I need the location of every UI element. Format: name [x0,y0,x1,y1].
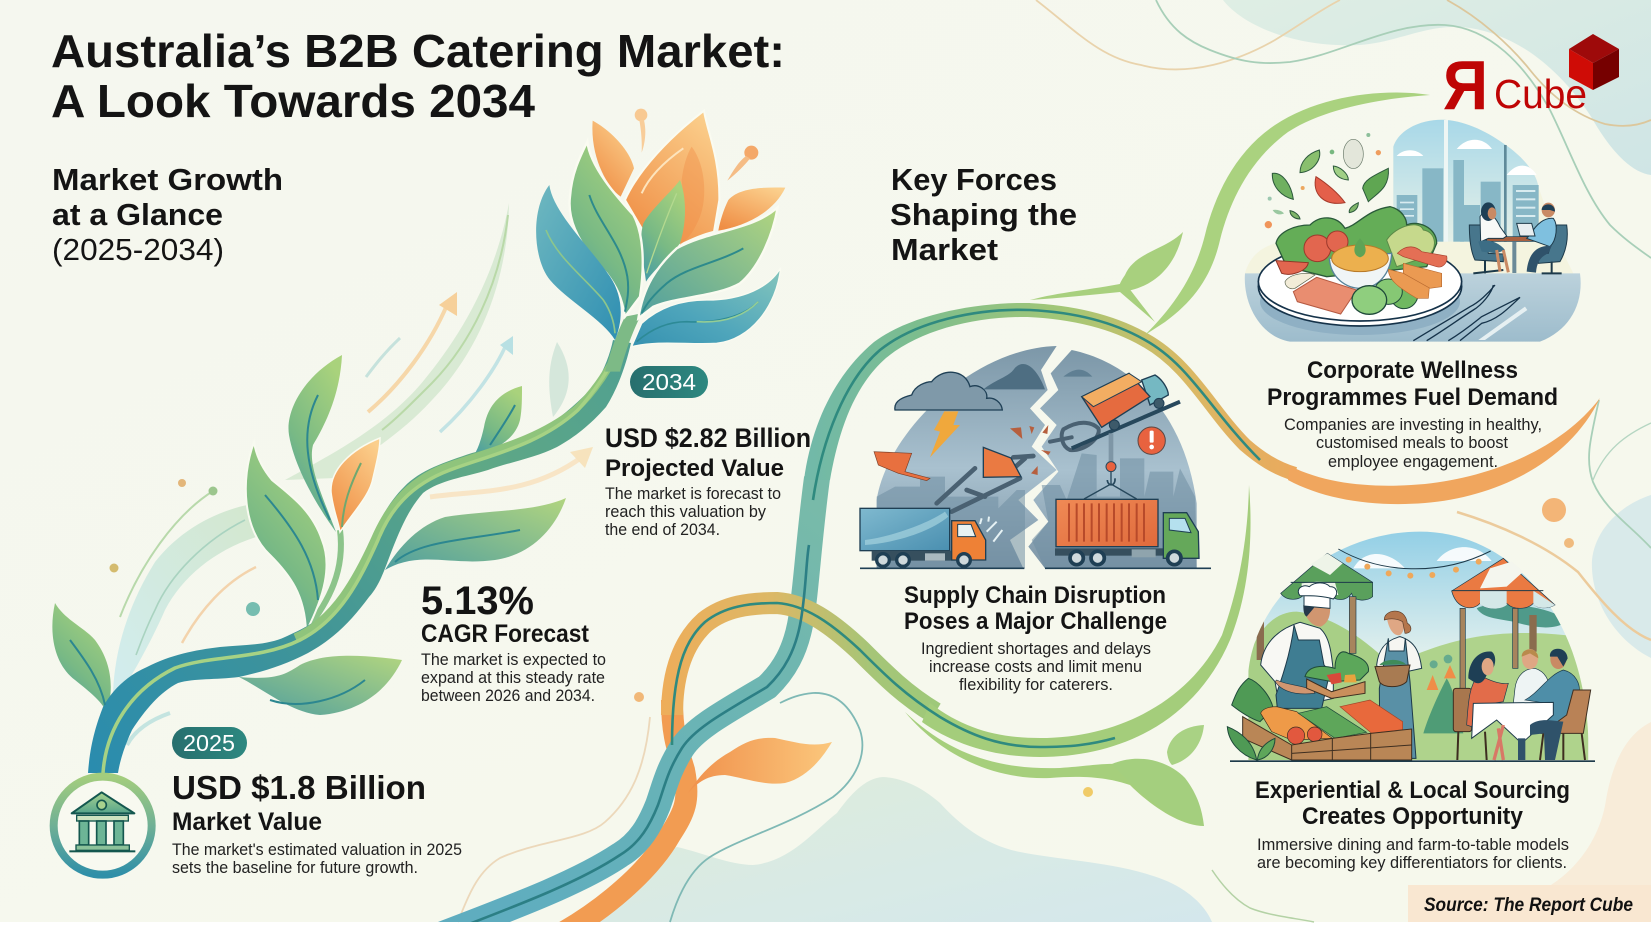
office people [1469,202,1567,273]
text: corporate wellness: customised meals to boost [1316,433,1508,452]
text: supply chain: increase costs and limit menu [929,657,1142,676]
text: corporate wellness [1267,357,1558,471]
stat: CAGR: expand at this steady rate [421,668,605,687]
logo: RCube: Cube [1494,71,1587,117]
pill: 2034 [630,366,708,398]
hills [1243,604,1590,760]
dome right [1028,350,1197,568]
padlock box [983,447,1021,477]
icon: bank [54,777,152,875]
illustration: local market dining [1227,532,1595,762]
heading: key forces: Market [891,232,998,267]
spark marks [980,517,1002,542]
salmon pieces [1388,269,1430,298]
ground line [1230,760,1595,762]
right awning [1452,558,1555,702]
source box: Source: The Report Cube [1424,895,1633,916]
logo: RCube [1443,34,1619,124]
tomatoes [1304,235,1331,262]
ribbon: green tail [922,485,1251,757]
string lights [1338,549,1491,579]
leaf: top left green [570,142,643,317]
text: corporate wellness: Corporate Wellness [1307,357,1518,384]
blue truck [860,508,986,566]
vine upper green band [295,345,620,637]
illustration: salad and office [1245,120,1581,342]
leaf: orange on plant [331,438,380,532]
petal: inner green [641,180,685,282]
lightning [930,411,960,457]
stamen [635,109,758,181]
clouds [1353,547,1492,568]
text: corporate wellness: Companies are investing in healthy, [1284,415,1542,434]
pill: 2025 [172,727,247,759]
title [51,25,785,127]
shards [1010,425,1051,475]
illustration: supply chain disruption [860,346,1211,568]
text: supply chain [904,582,1167,694]
arrow: peach horizontal [430,447,593,497]
ribbon: lower green branch [905,712,1204,826]
heading: market growth [52,162,283,267]
heading: key forces: Shaping the [890,197,1077,232]
stat: 2025 value [172,769,462,877]
flower stem [605,313,642,372]
ribbon: dark center lines [430,310,1260,930]
petal: left orange [592,121,634,197]
torn flag [874,452,930,481]
stat: CAGR [421,579,606,705]
heading: market growth: Market Growth [52,162,283,197]
petal: main orange [625,111,719,245]
bread slice [1285,273,1315,289]
heading: market growth: at a Glance [52,197,223,232]
chain right [1050,423,1099,450]
office window [1245,120,1573,273]
stat: 2034 value: The market is forecast to [605,484,781,503]
clouds [895,372,1002,410]
chain left [937,456,1033,512]
petal: right orange [718,188,785,231]
stat: 2034 value: Projected Value [605,455,784,482]
branch: top green sweep [1145,93,1430,335]
tilted truck [1082,373,1168,430]
leaf: bottom teal [632,268,781,347]
leaf: lower left [52,603,111,712]
text: experiential [1255,777,1570,872]
thin decorative curves [458,0,1651,922]
stat: 2034 value: USD $2.82 Billion [605,423,811,453]
logo: RCube: Я [1443,46,1488,124]
sauce bowl [1329,253,1392,288]
leaf: small upper right [472,386,522,458]
ribbon: orange lower strand [555,700,686,930]
crane hook [1084,433,1137,499]
text: experiential: are becoming key differentiators for clients. [1257,853,1567,872]
stat: 2025 value: Market Value [172,808,322,836]
main vine [88,340,631,773]
text: experiential: Immersive dining and farm-to-table models [1257,835,1569,854]
stat: 2025 value: The market's estimated valuation in 2025 [172,840,462,859]
leaf: upper [288,355,342,532]
arrow: teal [440,336,513,432]
leaf: orange near loop [688,738,832,793]
heading: key forces [890,162,1077,267]
text: supply chain: Poses a Major Challenge [904,608,1167,635]
text: experiential: Creates Opportunity [1302,803,1524,830]
arrow: orange [368,292,457,412]
container truck [1055,499,1199,565]
branch: side twig with leaf [1030,232,1183,322]
salmon [1293,277,1357,314]
chair right [1530,690,1591,760]
ground line [860,566,1211,571]
veins on plant leaves [70,395,520,705]
pale leaf [549,342,569,417]
stat: CAGR: CAGR Forecast [421,620,590,648]
plate [1258,247,1462,326]
flower illustration [536,109,785,372]
sky dome [1248,532,1588,760]
stat: 2025 value: USD $1.8 Billion [172,769,426,806]
leaf: lower right [239,656,402,715]
source box [1408,885,1651,922]
ribbons [430,303,1600,930]
leaf: right mid [385,498,566,570]
text: supply chain: flexibility for caterers. [959,675,1113,694]
warning sign [1138,427,1165,454]
left awning [1281,553,1373,653]
tomato slice [1315,177,1345,203]
dot accents right [634,498,1574,797]
stat: 2025 value: sets the baseline for future growth. [172,858,418,877]
plate shadow [1260,268,1460,335]
growth plant illustration [52,203,631,773]
vine highlight [103,342,622,773]
text: experiential: Experiential & Local Sourcing [1255,777,1570,804]
dining table [1472,702,1553,743]
hand crate [1305,652,1369,698]
title: Australia’s B2B Catering Market: [51,25,785,77]
heading: key forces: Key Forces [891,162,1057,197]
greens [1276,207,1437,277]
text: corporate wellness: Programmes Fuel Demand [1267,384,1558,411]
title: A Look Towards 2034 [51,75,535,127]
dome left [877,346,1057,568]
ribbon: teal main strand [430,478,817,930]
pill: 2034: 2034 [642,369,696,395]
twig: leaf bases to vine [305,530,341,632]
faint ribbon upper [285,203,509,480]
diners [1453,649,1579,760]
heading: market growth: (2025-2034) [52,232,224,267]
stat: CAGR: between 2026 and 2034. [421,686,595,705]
leaf: right green [638,207,778,318]
ribbon: orange end sweep [1288,398,1600,504]
stat: CAGR: The market is expected to [421,650,606,669]
leaf: lower green leaf [1112,759,1204,826]
chef [1261,583,1337,710]
stat: 2034 value: the end of 2034. [605,520,720,539]
skyline [877,453,1197,568]
leaf: small green [1167,725,1204,765]
ribbon: teal-to-green taper [804,303,1030,480]
market crates [1227,700,1412,760]
ribbon: upper arch [1028,310,1295,474]
text: supply chain: Ingredient shortages and delays [921,639,1151,658]
floor [1245,273,1581,342]
text: supply chain: Supply Chain Disruption [904,582,1166,609]
floating leaves [1272,150,1388,219]
ribbon: gold-green loop [672,603,935,715]
white seed [1343,139,1363,169]
vegetables left [1232,678,1273,722]
cucumbers [1390,279,1418,309]
stat: 2034 value: reach this valuation by [605,502,766,521]
faint ribbon lower [113,505,256,705]
text: corporate wellness: employee engagement. [1328,452,1498,471]
woman [1375,611,1422,758]
fork and knife [1413,285,1520,341]
pill: 2025: 2025 [183,730,235,756]
ramp [1072,402,1180,448]
stat: CAGR: 5.13% [421,579,534,623]
leaf: large centre [246,442,327,632]
stat: 2034 value [605,423,811,539]
leaf: left teal [536,185,621,340]
